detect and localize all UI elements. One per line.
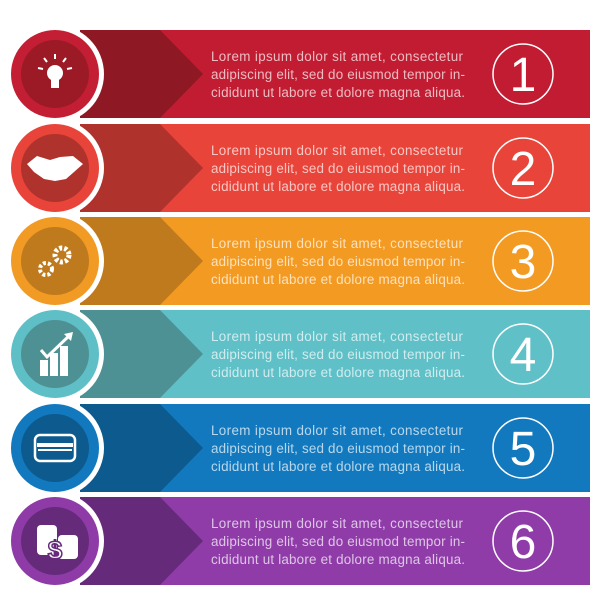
panel: step 3: cididunt ut labore et dolore magna aliqua. [211,272,465,287]
number 5 [493,418,553,478]
panel: step 1: adipiscing elit, sed do eiusmod tempor in- [211,67,465,82]
number 6: 6 [510,516,536,569]
panel: step 5 [6,399,590,497]
text block 2: Lorem ipsum dolor sit amet, consectetur [211,143,464,158]
icon: light bulb [38,54,72,88]
panel: step 6: cididunt ut labore et dolore magna aliqua. [211,552,465,567]
panel: step 6: adipiscing elit, sed do eiusmod tempor in- [211,534,465,549]
panel: step 3: adipiscing elit, sed do eiusmod tempor in- [211,254,465,269]
number 5: 5 [510,423,536,476]
panel: step 3 [6,212,590,310]
number 3 [493,231,553,291]
number 6 [493,511,553,571]
number 2 [493,138,553,198]
number 1: 1 [510,49,536,102]
panel: step 5: adipiscing elit, sed do eiusmod tempor in- [211,441,465,456]
panel: step 4: cididunt ut labore et dolore magna aliqua. [211,365,465,380]
panel: step 1 [6,25,590,123]
icon: coins [37,525,78,565]
text block 4: Lorem ipsum dolor sit amet, consectetur [211,329,464,344]
panel: step 2: cididunt ut labore et dolore magna aliqua. [211,179,465,194]
panel: step 4: adipiscing elit, sed do eiusmod tempor in- [211,347,465,362]
panel: step 5: cididunt ut labore et dolore magna aliqua. [211,459,465,474]
icon: gears [40,248,69,275]
number 1 [493,44,553,104]
text block 6: Lorem ipsum dolor sit amet, consectetur [211,516,464,531]
panel: step 2: adipiscing elit, sed do eiusmod tempor in- [211,161,465,176]
panel: step 4 [6,305,590,403]
number 4 [493,324,553,384]
panel: step 1: cididunt ut labore et dolore magna aliqua. [211,85,465,100]
icon: growth chart [40,332,73,376]
icon: handshake [27,156,83,181]
panel: step 6 [6,492,590,590]
text block 3: Lorem ipsum dolor sit amet, consectetur [211,236,464,251]
panel: step 2 [6,119,590,217]
number 2: 2 [510,143,536,196]
icon: credit card [35,435,75,461]
number 4: 4 [510,329,536,382]
text block 1: Lorem ipsum dolor sit amet, consectetur [211,49,464,64]
text block 5: Lorem ipsum dolor sit amet, consectetur [211,423,464,438]
number 3: 3 [510,236,536,289]
icon: coins: $ [48,535,63,565]
